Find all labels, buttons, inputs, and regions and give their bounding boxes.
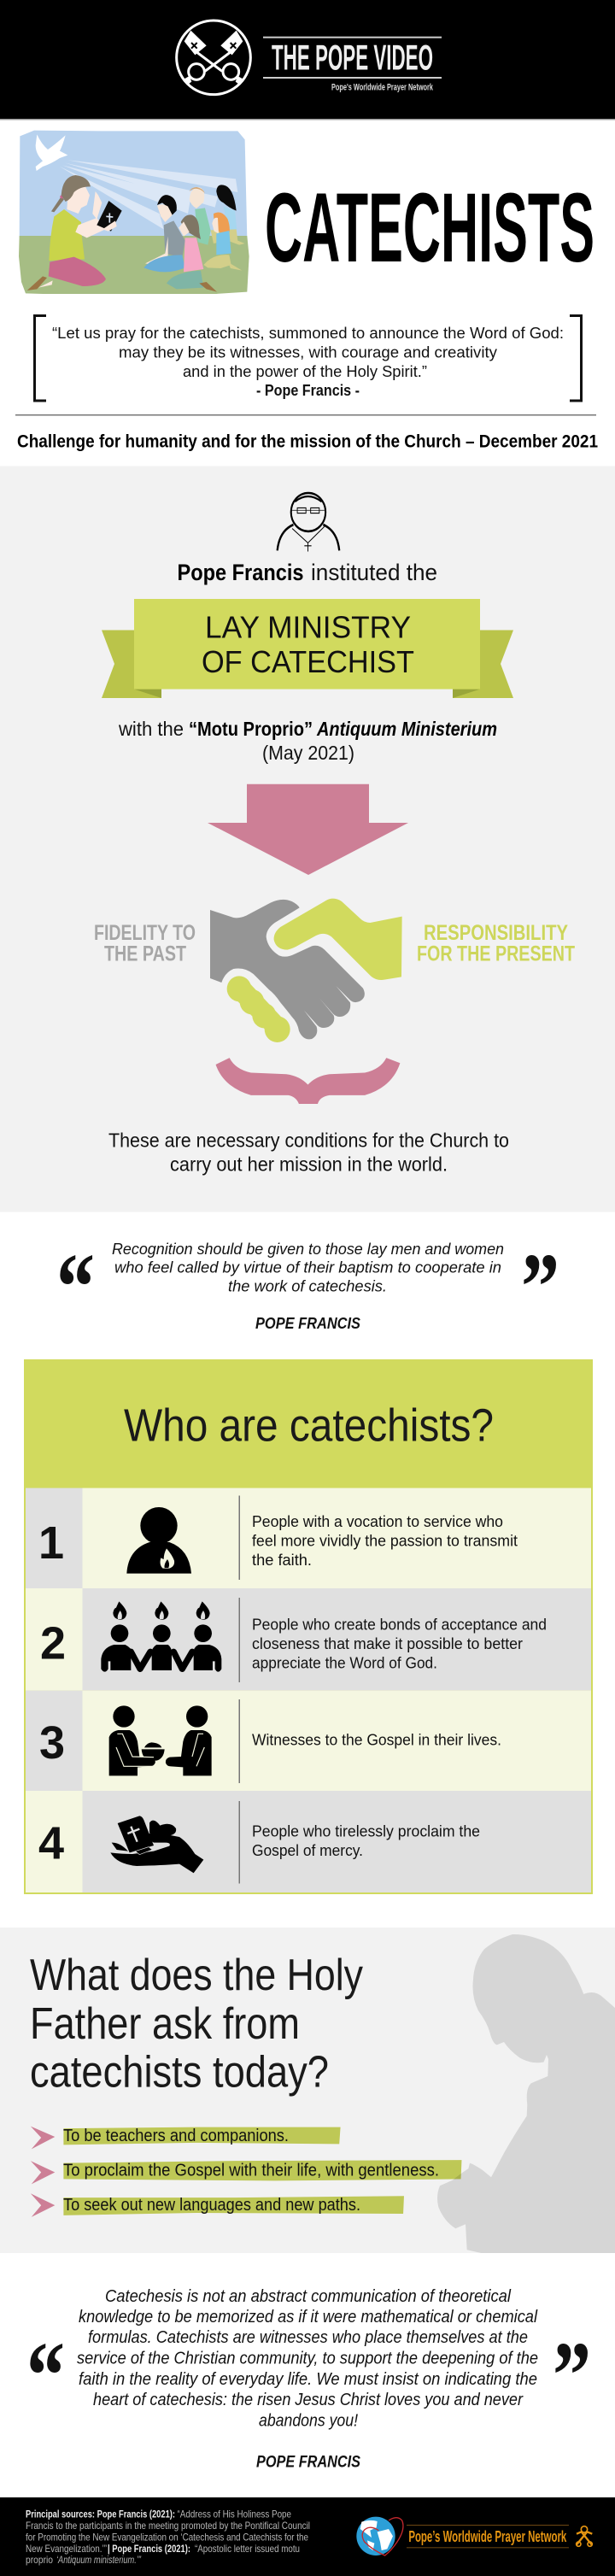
ribbon banner: LAY MINISTRY [205,610,411,644]
header banner [0,0,615,120]
quote: recognition: POPE FRANCIS [255,1315,360,1332]
icon: pope figure [278,493,339,552]
quote: recognition: ” [521,1235,559,1341]
heading: catechists today? [30,2048,329,2098]
row 3 [26,1691,591,1791]
heading: Who are catechists? [124,1400,494,1452]
text: responsibility: RESPONSIBILITY [424,921,568,945]
text: motu proprio: “Motu Proprio” [189,718,313,740]
heading: What does the Holy [30,1951,363,2000]
quote: catechesis: “ [26,2323,65,2429]
brace [216,1058,400,1104]
row 4: Gospel of mercy. [252,1842,363,1859]
quote: catechesis: heart of catechesis: the risen Jesus Christ loves you and never [93,2391,524,2409]
text: necessary conditions [108,1130,509,1176]
panel: lay ministry [0,466,615,1212]
logo subtitle: Pope's Worldwide Prayer Network [331,83,434,93]
text: sources: New Evangelization.’” [26,2543,107,2555]
quote: recognition [56,1235,559,1341]
text: Pope Francis instituted the [178,560,437,585]
bullet list: To proclaim the Gospel with their life, with gentleness. [63,2162,439,2180]
illustration: catechist teaching children [19,131,249,294]
row 4 [26,1791,591,1892]
text: responsibility [417,921,575,966]
bullet list: To be teachers and companions. [63,2127,289,2145]
logo wordmark: THE POPE VIDEO [272,38,433,78]
text: sources: Francis to the participants in the meeting promoted by the Pontifical Council [26,2520,310,2532]
text: fidelity: THE PAST [104,942,186,966]
arrow: down [208,784,408,875]
row 1: 1 [38,1517,64,1569]
text: necessary conditions: carry out her mission in the world. [170,1153,448,1176]
prayer quote with brackets: - Pope Francis - [256,381,360,399]
text: fidelity [94,921,196,966]
icon: crossed keys emblem [177,21,250,95]
quote: catechesis: service of the Christian community, to support the deepening of the [77,2350,538,2368]
row 4: People who tirelessly proclaim the [252,1823,480,1840]
quote: catechesis: faith in the reality of everyday life. We must insist on indicating the [79,2370,537,2389]
text: sources: proprio [26,2554,53,2566]
row 2: appreciate the Word of God. [252,1654,437,1671]
text: responsibility: FOR THE PRESENT [417,942,575,966]
row 1: People with a vocation to service who [252,1513,503,1530]
bullet list [31,2127,461,2217]
row 3: Witnesses to the Gospel in their lives. [252,1731,501,1748]
panel: holy father asks [0,1928,615,2253]
ribbon banner [102,599,513,698]
text: Pope Francis instituted the: Pope Francis [178,560,304,585]
row 3: 3 [39,1717,65,1769]
quote: catechesis: knowledge to be memorized as if it were mathematical or chemical [79,2308,538,2327]
row 4: 4 [38,1818,64,1869]
prayer quote with brackets: “Let us pray for the catechists, summoned to announce the Word of God: [52,324,564,342]
row 2: closeness that make it possible to better [252,1635,523,1652]
quote: catechesis [26,2287,591,2471]
text: sources: for Promoting the New Evangelization on ‘Catechesis and Catechists for the [26,2531,308,2543]
icon: person with flame [126,1507,191,1574]
heading [30,1951,363,2098]
text: motu proprio: Antiquum Ministerium [316,718,497,740]
text: sources: Principal sources: Pope Francis (2021): [26,2509,175,2520]
text: motu proprio: with the [118,718,184,740]
footer [0,2497,615,2576]
icon: handshake [210,899,402,1042]
heading: Father ask from [30,1999,300,2049]
quote: recognition: the work of catechesis. [228,1278,387,1295]
icon: two people sharing a bowl [109,1705,212,1775]
row 2: People who create bonds of acceptance and [252,1616,547,1633]
prayer quote with brackets: may they be its witnesses, with courage and creativity [119,343,498,361]
row 1 [26,1488,591,1588]
text: sources: “Apostolic letter issued motu [195,2543,300,2555]
text: sources [26,2509,310,2566]
icon: three people with flames [101,1601,221,1672]
silhouette: praying pope [437,1934,615,2253]
text: motu proprio: (May 2021) [262,742,354,764]
row 1: feel more vividly the passion to transmit [252,1533,518,1550]
quote: catechesis: abandons you! [259,2412,358,2431]
quote: catechesis: ” [553,2323,591,2429]
quote: catechesis: POPE FRANCIS [256,2454,360,2471]
row 2: 2 [40,1617,66,1669]
text: Pope Francis instituted the: instituted the [311,560,437,585]
icon: hand holding gospel and heart [110,1816,203,1873]
quote: recognition: Recognition should be given to those lay men and women [112,1241,504,1258]
logo: worldwide prayer network [356,2517,592,2555]
ribbon banner: OF CATECHIST [202,644,414,679]
text: fidelity: FIDELITY TO [94,921,196,945]
quote: catechesis: formulas. Catechists are witnesses who place themselves at the [88,2328,528,2347]
text: sources: “Address of His Holiness Pope [178,2509,291,2520]
text: sources: | Pope Francis (2021): [108,2543,190,2555]
text: motu proprio [118,718,497,764]
text: necessary conditions: These are necessary conditions for the Church to [108,1130,509,1152]
quote: recognition: who feel called by virtue of their baptism to cooperate in [114,1259,501,1276]
quote: recognition: “ [56,1235,95,1341]
row 1: the faith. [252,1552,312,1569]
prayer quote with brackets: and in the power of the Holy Spirit.” [183,362,427,380]
row 2 [26,1588,591,1691]
quote: catechesis: Catechesis is not an abstract communication of theoretical [105,2287,511,2306]
bullet list: To seek out new languages and new paths. [63,2196,360,2215]
panel: who are catechists [24,1359,593,1894]
prayer quote with brackets [34,316,581,401]
text: sources: ‘Antiquum ministerium.’” [56,2554,142,2566]
